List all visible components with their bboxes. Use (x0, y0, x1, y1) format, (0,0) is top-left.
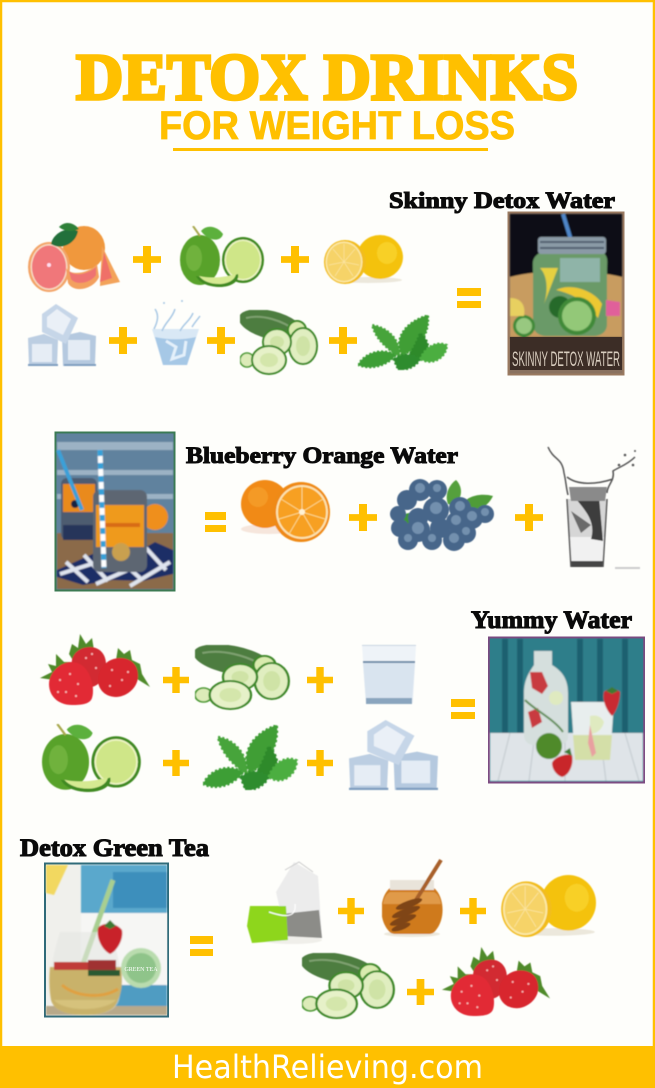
plus sign (307, 667, 333, 693)
footer text: HealthRelieving.com: HealthRelieving.com (172, 1048, 483, 1086)
icon: blueberries (390, 479, 494, 551)
equals sign (190, 936, 213, 956)
plus sign (109, 327, 137, 354)
photo: yummy water bottle and glass (489, 638, 644, 782)
icon: glass of water (362, 645, 416, 704)
plus sign (460, 898, 486, 924)
heading: Detox Green Tea: Detox Green Tea (20, 835, 210, 862)
photo: blueberry orange jars (56, 432, 174, 590)
icon: ice cubes (349, 720, 438, 790)
plus sign (281, 246, 309, 273)
title underline (173, 148, 488, 151)
section: Blueberry Orange Water (56, 432, 640, 590)
title: Detox Drinks: DETOX DRINKS (76, 41, 578, 114)
icon: strawberries (442, 947, 550, 1016)
icon: lemon (501, 875, 596, 937)
icon: mint (203, 725, 297, 790)
plus sign (407, 979, 434, 1005)
icon: grapefruit (28, 223, 120, 292)
icon: mint (358, 315, 447, 370)
plus sign (163, 750, 189, 776)
plus sign (207, 327, 235, 354)
icon: lemon (324, 235, 403, 284)
icon: cucumber (236, 303, 317, 374)
heading: Skinny Detox Water: Skinny Detox Water (389, 188, 615, 213)
icon: orange (241, 480, 330, 542)
plus sign (349, 504, 377, 531)
photo: skinny detox water jar (508, 212, 624, 374)
heading: Yummy Water: Yummy Water (471, 607, 632, 634)
plus sign (163, 667, 189, 693)
plus sign (515, 504, 543, 531)
icon: cucumber (190, 638, 289, 709)
section: Skinny Detox Water (28, 188, 624, 374)
plus sign (133, 246, 161, 273)
photo label: Green Tea: GREEN TEA (124, 967, 158, 973)
section: Detox Green Tea (20, 835, 596, 1018)
photo: detox green tea glass (45, 864, 168, 1016)
subtitle: For Weight Loss: FOR WEIGHT LOSS (159, 104, 515, 148)
icon: tea bag (247, 862, 322, 944)
icon: glass of water splash (152, 300, 200, 365)
section: Yummy Water (40, 607, 644, 792)
icon: ice cubes (28, 304, 96, 366)
icon: lime (42, 724, 141, 792)
plus sign (338, 898, 364, 924)
icon: cucumber (297, 946, 394, 1018)
equals sign (457, 288, 481, 308)
equals sign (451, 699, 475, 719)
icon: lime (180, 226, 264, 287)
icon: honey jar (381, 860, 443, 937)
icon: glass splash black and white (548, 447, 640, 569)
heading: Blueberry Orange Water: Blueberry Orange Water (186, 443, 458, 468)
equals sign (205, 512, 226, 532)
plus sign (329, 327, 357, 354)
icon: strawberries (40, 634, 150, 705)
footer banner (0, 1046, 655, 1088)
plus sign (307, 750, 333, 776)
